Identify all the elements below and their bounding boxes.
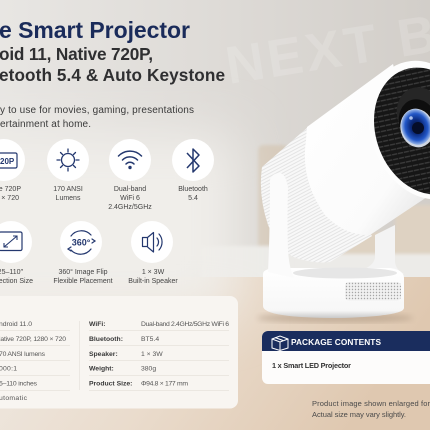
subtitle line 2: etooth 5.4 & Auto Keystone	[0, 65, 225, 85]
front louver face	[357, 53, 430, 209]
feature: bluetooth	[172, 139, 214, 202]
package item: 1 x Smart LED Projector	[272, 361, 351, 370]
background left fade	[0, 135, 235, 315]
spec values: left column: lative 720P, 1280 × 720	[0, 336, 66, 343]
spec labels: right column: Product Size:	[89, 380, 132, 388]
spec values: right column	[141, 321, 229, 388]
title block	[0, 17, 225, 130]
feature: wifi: 2.4GHz/5GHz	[108, 204, 152, 211]
base top recess	[293, 268, 397, 278]
subtitle line 1: oid 11, Native 720P,	[0, 44, 153, 64]
feature: projection size	[0, 221, 33, 285]
feature: 360 flip	[53, 221, 113, 285]
feature: wifi	[108, 139, 152, 211]
spec labels: right column	[89, 321, 132, 388]
spec values: right column: Φ94.8 × 177 mm	[141, 380, 188, 388]
spec values: left column: 70 ANSI lumens	[0, 351, 46, 358]
feature: 360 flip: 360°	[72, 238, 91, 248]
feature: wifi: Dual-band	[114, 186, 146, 193]
spec values: right column: 1 × 3W	[141, 351, 163, 358]
spec values: left column	[0, 321, 66, 402]
description: y to use for movies, gaming, presentations	[0, 105, 194, 116]
feature: bluetooth: Bluetooth	[178, 186, 208, 193]
package heading: PACKAGE CONTENTS	[291, 337, 381, 347]
disclaimer note: Actual size may vary slightly.	[312, 410, 406, 419]
lens	[396, 105, 430, 151]
feature: lumens	[47, 139, 89, 202]
title: e Smart Projector	[0, 17, 190, 43]
projector product image	[257, 45, 430, 323]
feature: speaker: Built-in Speaker	[128, 278, 178, 285]
feature icons	[0, 139, 214, 285]
body ribbed rear	[261, 127, 372, 262]
front arm	[268, 173, 294, 278]
speaker grille	[345, 282, 401, 300]
background sofa	[200, 145, 430, 280]
feature: wifi: WiFi 6	[120, 195, 140, 202]
feature: lumens: 170 ANSI	[53, 186, 83, 193]
background table	[0, 277, 430, 430]
spec labels: right column: Weight:	[89, 366, 114, 372]
spec values: right column: BT5.4	[141, 336, 159, 343]
spec values: right column: 380g	[141, 366, 156, 372]
panel: specifications	[0, 296, 238, 408]
feature: lumens: Lumens	[56, 195, 81, 202]
description	[0, 105, 194, 130]
spec labels: right column: Bluetooth:	[89, 336, 123, 343]
spec labels: right column: WiFi:	[89, 321, 106, 328]
back arm	[338, 225, 404, 274]
spec values: left column: 5–110 inches	[0, 380, 38, 388]
feature: speaker	[128, 221, 178, 285]
spec values: right column: Dual-band 2.4GHz/5GHz WiFi 6	[141, 321, 229, 328]
icon: box	[272, 336, 288, 350]
feature: 360 flip: 360° Image Flip	[58, 268, 108, 276]
feature: 360 flip: Flexible Placement	[53, 278, 113, 285]
description: ertainment at home.	[0, 119, 91, 130]
feature: 720P	[0, 139, 25, 202]
disclaimer note: Product image shown enlarged for	[312, 399, 430, 408]
feature: 720P: 20P	[0, 157, 15, 166]
lens housing	[391, 82, 430, 146]
base	[263, 268, 404, 318]
table shadow	[257, 313, 413, 323]
front rim	[350, 45, 430, 215]
feature: speaker: 1 × 3W	[142, 269, 165, 276]
feature: bluetooth: 5.4	[188, 195, 198, 202]
panel: package contents	[262, 331, 430, 384]
spec labels: right column: Speaker:	[89, 351, 118, 358]
body smooth front	[305, 64, 427, 235]
disclaimer note	[312, 399, 430, 419]
